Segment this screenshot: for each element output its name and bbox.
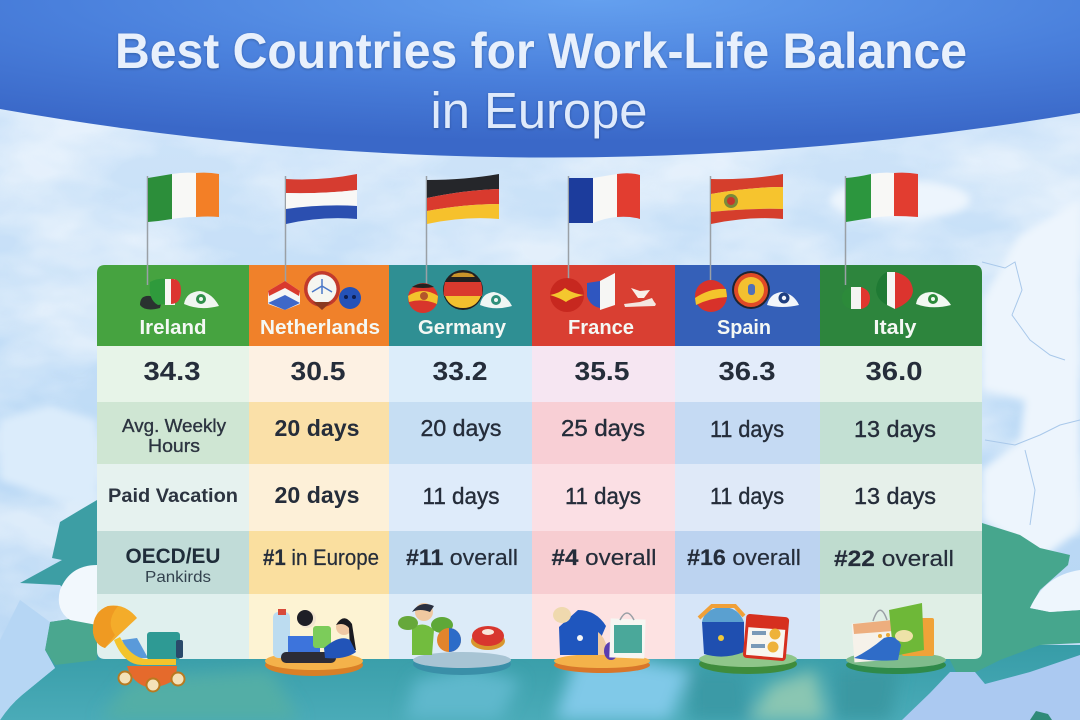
row values: #4 overall	[552, 545, 656, 570]
row values: 13 days	[854, 483, 936, 509]
row values: 33.2	[432, 356, 488, 386]
header row: France	[568, 317, 634, 339]
header icons: Germany	[408, 270, 512, 313]
land: bottom sea and continents	[0, 500, 1080, 720]
header icons: Netherlands	[268, 271, 361, 310]
header row: Spain	[717, 317, 771, 339]
row values: OECD/EU	[126, 545, 220, 568]
row values: 25 days	[561, 415, 645, 441]
row values: 34.3	[144, 356, 200, 386]
row values: 11 days	[565, 483, 641, 509]
title	[115, 23, 967, 139]
row values: 36.3	[718, 356, 776, 386]
row values: Pankirds	[145, 569, 211, 586]
row values: 11 days	[422, 483, 500, 509]
flag: Italy	[846, 173, 918, 285]
flag: Ireland	[148, 173, 219, 285]
illustration: stroller	[93, 606, 184, 692]
row values: 11 days	[710, 483, 784, 509]
flag: Spain	[710, 174, 783, 285]
flag: France	[568, 173, 640, 285]
header icons: Spain	[695, 271, 799, 312]
row values: 20 days	[274, 482, 360, 508]
row values: #16 overall	[687, 545, 801, 570]
row values: 13 days	[854, 416, 936, 442]
row values: 30.5	[290, 356, 346, 386]
row values: 11 days	[710, 416, 784, 442]
row values: Avg. Weekly	[122, 416, 226, 436]
comparison table	[97, 265, 982, 659]
header icons: Ireland	[140, 279, 219, 309]
illustration: calendar and backpack	[846, 603, 946, 674]
row values: 35.5	[574, 356, 630, 386]
header row: Ireland	[140, 317, 206, 339]
row values: #1 in Europe	[263, 545, 379, 570]
illustration: person with produce	[398, 603, 511, 675]
flag: Netherlands	[286, 174, 357, 285]
row values: Hours	[148, 436, 200, 456]
row values: 20 days	[420, 415, 502, 441]
flag: Germany	[426, 174, 499, 285]
title: in Europe	[430, 82, 648, 139]
title banner	[0, 0, 1080, 158]
row values: Paid Vacation	[108, 486, 238, 507]
header row: Germany	[418, 317, 507, 339]
title: Best Countries for Work-Life Balance	[115, 23, 967, 79]
header row	[97, 265, 982, 346]
row values	[108, 356, 954, 586]
illustration: bag and calendar	[699, 606, 797, 674]
row values: 36.0	[866, 356, 922, 386]
row values: 20 days	[274, 415, 360, 441]
header row: Netherlands	[260, 317, 380, 339]
illustration: shirt and board	[553, 607, 650, 673]
header row: Italy	[874, 317, 917, 339]
illustration: family on platform	[265, 609, 363, 676]
row values: #22 overall	[834, 546, 954, 571]
row values: #11 overall	[406, 545, 518, 570]
header icons: Italy	[842, 272, 951, 309]
header icons: France	[550, 273, 656, 312]
table body cells	[97, 346, 982, 659]
